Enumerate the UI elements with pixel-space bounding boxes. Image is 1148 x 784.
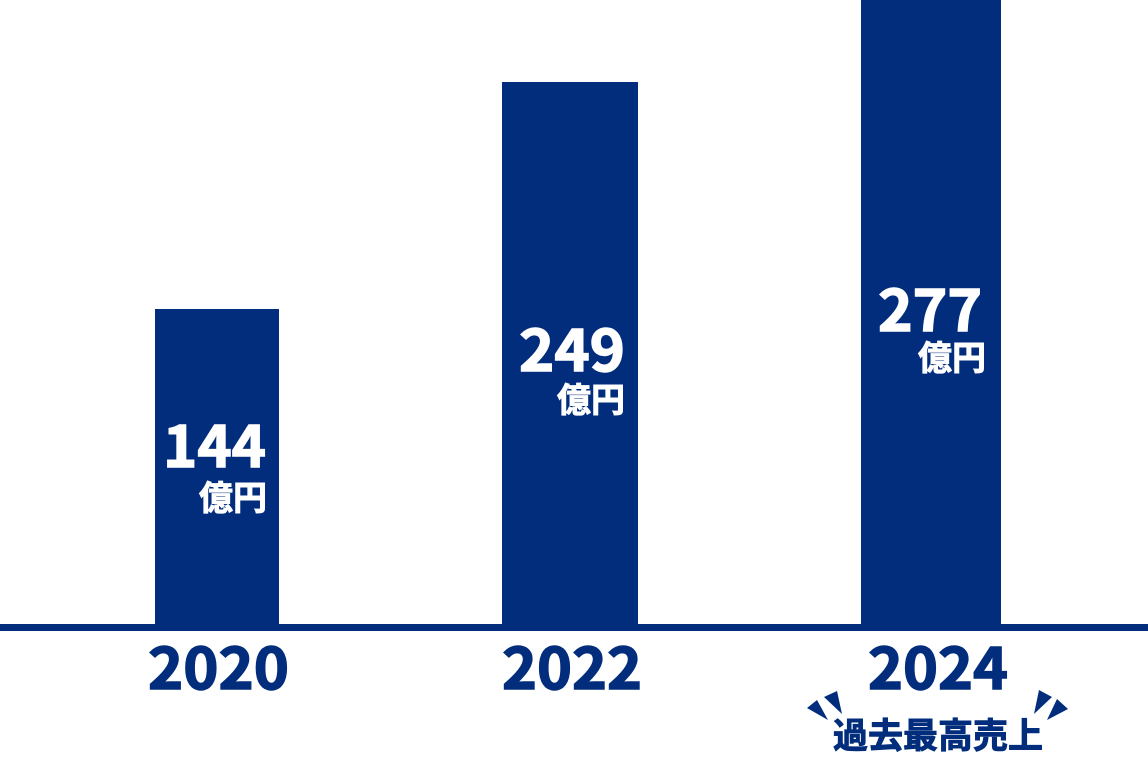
year labels: 2020 [148, 624, 289, 706]
bar: 2024 [861, 0, 1001, 626]
value: 249 oku yen [519, 306, 625, 422]
icon: right burst marks [1034, 690, 1068, 720]
callout: record high sales [807, 690, 1068, 759]
axis baseline [0, 624, 1148, 631]
year labels: 2022 [502, 624, 642, 706]
year labels [148, 624, 1008, 706]
value: 144 oku yen: 144 [163, 402, 266, 484]
value: 249 oku yen: 億円 [557, 373, 625, 422]
year labels: 2024 [868, 624, 1008, 706]
value: 144 oku yen: 億円 [199, 471, 267, 520]
bar: 2022 [502, 82, 638, 626]
value: 144 oku yen [163, 402, 267, 520]
text: 過去最高売上: 過去最高売上 [833, 708, 1043, 759]
value: 277 oku yen [878, 266, 986, 380]
value: 249 oku yen: 249 [519, 306, 625, 388]
value: 277 oku yen: 億円 [918, 331, 986, 380]
icon: left burst marks [807, 691, 842, 720]
bar: 2020 [155, 309, 279, 626]
value: 277 oku yen: 277 [878, 266, 982, 348]
